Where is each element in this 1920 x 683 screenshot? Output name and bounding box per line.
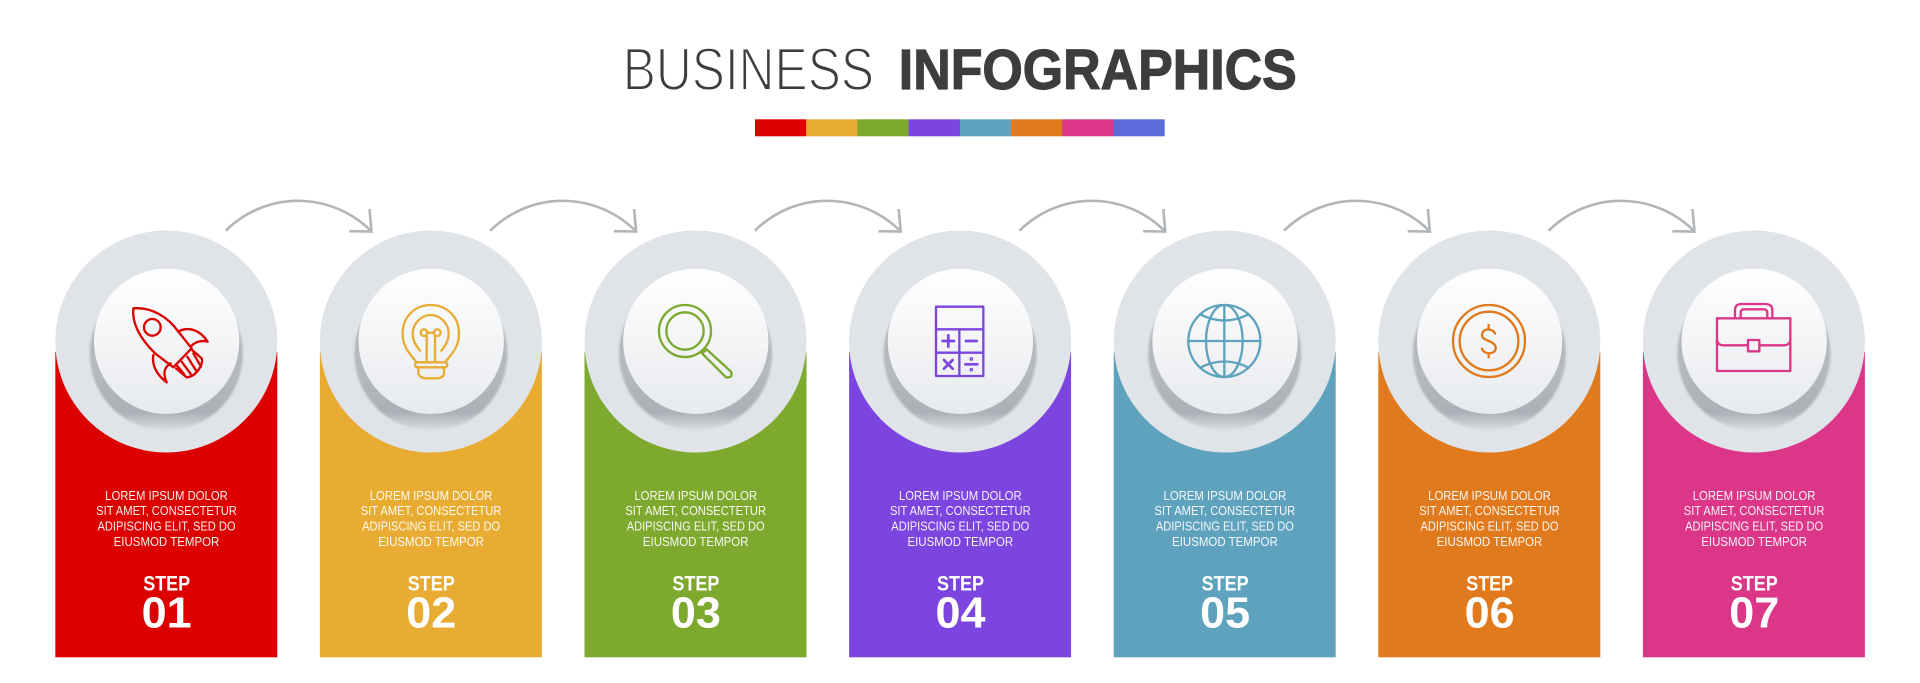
step 07 description: EIUSMOD TEMPOR [1701,534,1807,549]
step 03 description: LOREM IPSUM DOLOR [634,488,757,503]
step 07 description [1684,488,1824,549]
step 05 description [1155,488,1295,549]
step 04 description [890,488,1031,549]
title [623,35,1297,103]
step 06 description: EIUSMOD TEMPOR [1437,534,1542,549]
step 06 label: 06 [1465,588,1515,637]
panel: step 04 [849,230,1071,657]
step 02 description: LOREM IPSUM DOLOR [370,488,492,503]
step 02 label: STEP [408,573,455,596]
arrow: step 2 to 3 [490,201,636,232]
step 01 label: STEP [143,573,190,596]
step 02 description: SIT AMET, CONSECTETUR [361,503,501,518]
title: BUSINESS [623,35,874,103]
step 07 description: SIT AMET, CONSECTETUR [1684,503,1824,518]
step 01 description: LOREM IPSUM DOLOR [105,488,228,503]
step 06 label: STEP [1466,573,1513,596]
panel: step 06 [1378,230,1600,657]
step 04 description: SIT AMET, CONSECTETUR [890,503,1031,518]
step 05 description: ADIPISCING ELIT, SED DO [1156,518,1294,534]
step 04 description: ADIPISCING ELIT, SED DO [891,518,1029,534]
step 01 description: EIUSMOD TEMPOR [114,534,219,549]
step 07 description: LOREM IPSUM DOLOR [1693,488,1815,503]
step 07 label: STEP [1731,573,1778,596]
panel: step 05 [1114,230,1336,657]
icon: dollar coin [1453,305,1525,377]
icon: magnifier [659,305,732,377]
step 04 description: LOREM IPSUM DOLOR [899,488,1022,503]
icon: light bulb [403,305,459,378]
step 01 label: 01 [142,588,192,637]
step 02 label: 02 [406,588,456,637]
step 01 description: ADIPISCING ELIT, SED DO [98,518,236,534]
arrow: step 3 to 4 [755,201,901,232]
icon: calculator [936,307,983,376]
colour bar [755,119,1165,136]
step 05 description: SIT AMET, CONSECTETUR [1155,503,1295,518]
step 05 label: 05 [1200,588,1250,637]
step 03 description [625,488,766,549]
step 03 label: 03 [671,588,721,637]
panel: step 02 [320,230,542,657]
step 05 description: EIUSMOD TEMPOR [1172,534,1278,549]
panel: step 01 [55,230,277,657]
step 07 description: ADIPISCING ELIT, SED DO [1685,518,1823,534]
arrow: step 5 to 6 [1284,201,1430,232]
arrow: step 6 to 7 [1549,201,1694,232]
step 05 label: STEP [1202,573,1249,596]
step 06 description: SIT AMET, CONSECTETUR [1419,503,1560,518]
icon: briefcase [1717,304,1790,371]
step 02 description [361,488,501,549]
step 06 description: ADIPISCING ELIT, SED DO [1420,518,1558,534]
step 02 description: ADIPISCING ELIT, SED DO [362,518,500,534]
step 04 label: STEP [937,573,984,596]
title: INFOGRAPHICS [899,38,1297,102]
step 03 description: EIUSMOD TEMPOR [643,534,749,549]
step 07 label: 07 [1729,588,1779,637]
step 01 description: SIT AMET, CONSECTETUR [96,503,237,518]
step 06 description: LOREM IPSUM DOLOR [1428,488,1551,503]
step 03 label: STEP [672,573,719,596]
icon: globe [1188,305,1260,377]
arrow: step 1 to 2 [226,201,372,232]
arrow: step 4 to 5 [1020,201,1165,232]
icon: rocket [133,308,208,382]
step 01 description [96,488,237,549]
panel: step 07 [1643,230,1865,657]
panel: step 03 [584,230,806,657]
step 05 description: LOREM IPSUM DOLOR [1164,488,1286,503]
step 04 label: 04 [936,588,986,637]
step 03 description: SIT AMET, CONSECTETUR [625,503,766,518]
step 06 description [1419,488,1560,549]
step 03 description: ADIPISCING ELIT, SED DO [627,518,765,534]
step 04 description: EIUSMOD TEMPOR [907,534,1013,549]
step 02 description: EIUSMOD TEMPOR [378,534,484,549]
